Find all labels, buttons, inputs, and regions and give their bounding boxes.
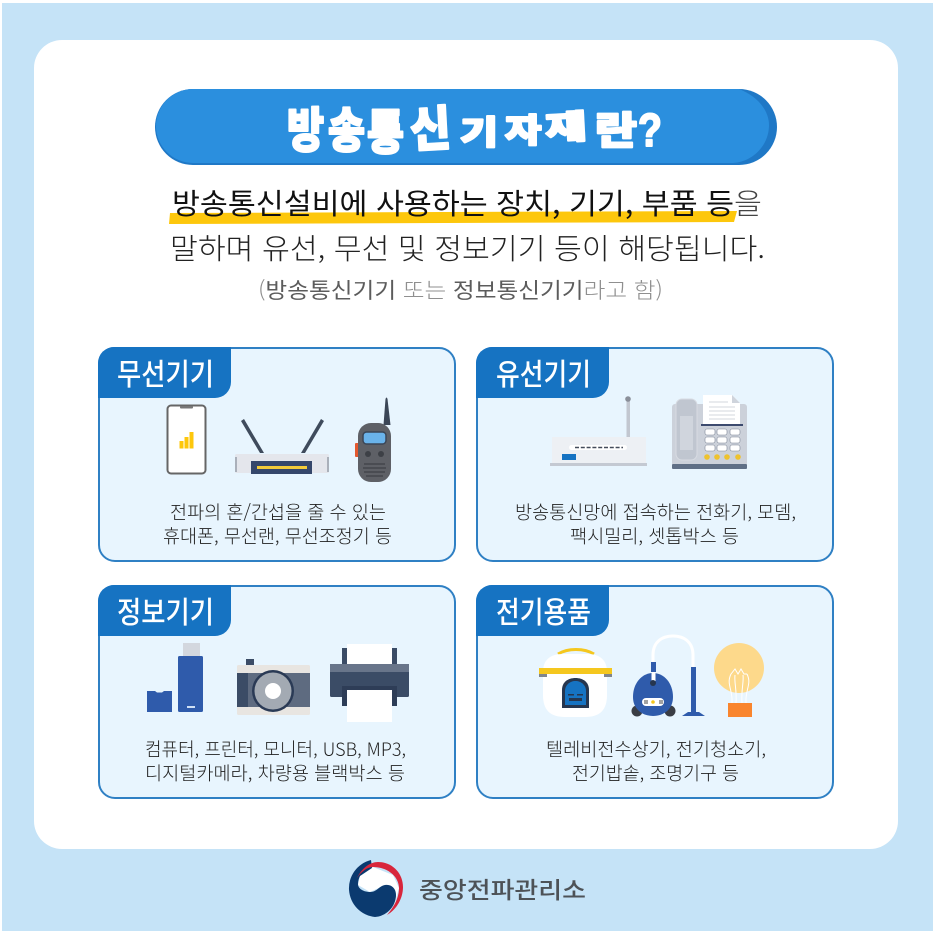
note text: (방송통신기기 또는 정보통신기기 라고 함): [258, 274, 663, 305]
description: 컴퓨터, 프린터, 모니터, USB, MP3,: [145, 736, 406, 762]
lead text: 방송통신설비에 사용하는 장치, 기기, 부품 등 을: [172, 181, 762, 223]
panel: 정보기기: [98, 585, 455, 798]
title banner: 신: [408, 91, 452, 162]
yellow highlight stroke: [169, 211, 737, 224]
description: [145, 736, 406, 786]
description: [163, 499, 392, 549]
title banner: 란: [595, 101, 637, 156]
description: 텔레비전수상기, 전기청소기,: [546, 736, 766, 762]
lead text: 말하며 유선, 무선 및 정보기기 등이 해당됩니다.: [170, 226, 765, 268]
panel: 유선기기: [476, 347, 833, 561]
icon: light bulb: [714, 643, 764, 717]
icon: fax machine: [672, 395, 747, 469]
description: [546, 736, 766, 786]
title banner: ?: [638, 105, 662, 157]
title banner: 기: [460, 106, 498, 154]
logo: government taegeuk symbol: [349, 860, 403, 917]
icon: camera: [237, 659, 310, 715]
tab: 무선기기: 무선기기: [117, 350, 214, 394]
icon: printer: [330, 644, 409, 722]
description: 팩시밀리, 셋톱박스 등: [570, 523, 739, 549]
icon: memory card and USB drive: [147, 643, 203, 712]
title banner: 통: [367, 94, 404, 163]
icon: wireless router: [235, 419, 329, 474]
panel: 무선기기: [98, 347, 455, 561]
description: 디지털카메라, 차량용 블랙박스 등: [145, 760, 405, 786]
description: 전파의 혼/간섭을 줄 수 있는: [170, 499, 386, 525]
icon: smartphone: [168, 406, 206, 474]
description: 방송통신망에 접속하는 전화기, 모뎀,: [515, 499, 796, 525]
description: 휴대폰, 무선랜, 무선조정기 등: [163, 523, 392, 549]
tab: 정보기기: 정보기기: [117, 588, 214, 632]
title banner: 재: [544, 101, 587, 150]
panel: 전기용품: [476, 585, 833, 798]
title banner: 송: [328, 92, 365, 161]
title banner: [155, 89, 777, 165]
icon: modem: [550, 396, 647, 466]
description: [515, 499, 796, 549]
icon: vacuum cleaner: [632, 636, 705, 716]
title banner: 방: [287, 92, 324, 161]
organization name: 중앙전파관리소: [419, 871, 586, 905]
description: 전기밥솥, 조명기구 등: [572, 760, 739, 786]
title banner: 자: [505, 105, 541, 152]
icon: rice cooker: [539, 650, 612, 717]
lead text: [170, 181, 765, 268]
icon: walkie-talkie: [355, 398, 391, 482]
tab: 유선기기: 유선기기: [496, 350, 591, 394]
tab: 전기용품: 전기용품: [496, 588, 591, 632]
